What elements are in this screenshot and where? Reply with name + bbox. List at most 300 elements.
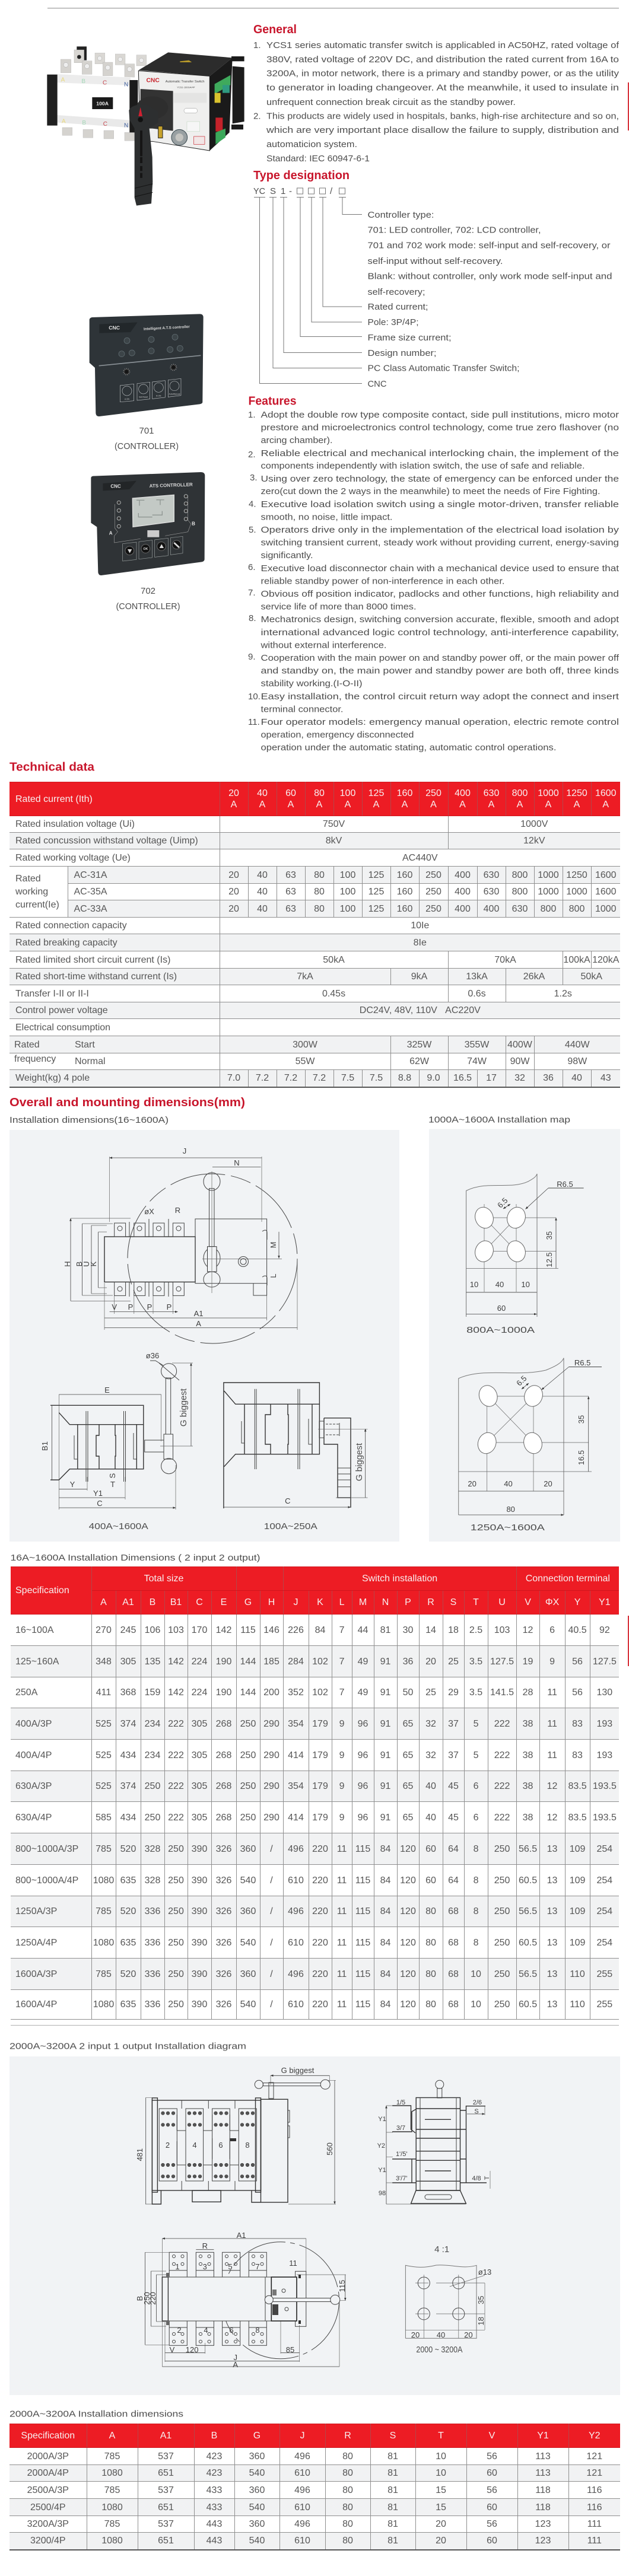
table: 16A-1600A installation dimensions: E	[221, 1597, 227, 1607]
table: 16A-1600A installation dimensions: 179	[312, 1719, 328, 1728]
table: technical data: 160	[397, 904, 412, 913]
table: 2000A-3200A installation dimensions: 785	[104, 2451, 120, 2462]
table: 16A-1600A installation dimensions: 336	[145, 1969, 160, 1979]
table: 16A-1600A installation dimensions: 44	[358, 1625, 368, 1635]
table: technical data: 630	[484, 887, 499, 897]
drawing: 4:1 hole detail: 18	[476, 2317, 485, 2326]
drawing: 800A-1000A hole pattern: 60	[497, 1304, 506, 1313]
table: 16A-1600A installation dimensions: 434	[120, 1750, 136, 1760]
table: 16A-1600A installation dimensions: 38	[523, 1750, 533, 1760]
table: technical data: 7kA	[297, 972, 313, 982]
table: 16A-1600A installation dimensions: 190	[216, 1656, 231, 1667]
table: 16A-1600A installation dimensions: 91	[380, 1750, 390, 1760]
table: 16A-1600A installation dimensions: 8	[474, 1843, 478, 1854]
drawing: 800A-1000A hole pattern: 800A~1000A	[466, 1325, 535, 1335]
table: 16A-1600A installation dimensions: 65	[403, 1750, 413, 1760]
table: 16A-1600A installation dimensions: 1250A/4P	[15, 1937, 57, 1948]
table: 16A-1600A installation dimensions: 222	[494, 1813, 510, 1822]
table: 16A-1600A installation dimensions: /	[270, 1876, 273, 1885]
table: 16A-1600A installation dimensions: H	[268, 1597, 275, 1607]
table: technical data: A	[316, 800, 322, 810]
table: technical data: 60	[285, 788, 296, 798]
photo: controller 701: B ON	[156, 394, 161, 397]
drawing: side view 400A-1600A	[40, 1351, 193, 1510]
drawing: 1250A-1600A hole pattern: 35	[577, 1415, 586, 1424]
table: 16A-1600A installation dimensions: 326	[216, 1906, 231, 1916]
table: technical data: 125	[368, 887, 384, 897]
text block: features list: without external interference.	[260, 641, 387, 650]
table: technical data: Transfer I-II or II-I	[15, 988, 89, 999]
drawing: 1250A-1600A hole pattern: 16.5	[577, 1450, 586, 1465]
drawing: plan view: 7	[255, 2262, 260, 2271]
table: 2000A-3200A installation dimensions: 81	[387, 2519, 398, 2529]
table: technical data: 7.2	[256, 1073, 269, 1083]
table: 16A-1600A installation dimensions: 411	[96, 1687, 111, 1698]
table: 2000A-3200A installation dimensions: 537	[158, 2485, 174, 2495]
table: 16A-1600A installation dimensions: 414	[288, 1813, 304, 1822]
table: 2000A-3200A installation dimensions: 651	[158, 2502, 174, 2513]
diagram: type designation code tree: 701: LED controller, 702: LCD controller,	[368, 225, 541, 235]
table: 16A-1600A installation dimensions: 12	[523, 1625, 533, 1635]
table: 16A-1600A installation dimensions: 11	[337, 1969, 347, 1979]
table: technical data: 1000	[538, 887, 559, 897]
photo: automatic transfer switch: C	[103, 121, 107, 128]
table: 2000A-3200A installation dimensions: 496	[294, 2485, 310, 2495]
text block: features list: Four operator models: emergency manual operation, electric remote control	[261, 717, 619, 727]
table: 16A-1600A installation dimensions: 120	[400, 1937, 416, 1948]
photo: controller 701: A ON	[125, 398, 130, 400]
table: 16A-1600A installation dimensions: 270	[96, 1625, 112, 1635]
table: technical data: Rated connection capacity	[15, 921, 127, 931]
drawing: side elevation with busbars: 3/7	[396, 2125, 405, 2132]
drawing: side view 400A-1600A: Y1	[93, 1489, 103, 1498]
drawing: 800A-1000A hole pattern: 35	[545, 1231, 554, 1240]
table: 16A-1600A installation dimensions: 368	[120, 1687, 136, 1698]
drawing: 4:1 hole detail: 2000 ~ 3200A	[416, 2345, 462, 2355]
table: 16A-1600A installation dimensions: 234	[145, 1750, 160, 1760]
table: technical data: 630	[484, 870, 499, 880]
table: 16A-1600A installation dimensions: 250	[240, 1719, 256, 1728]
table: 2000A-3200A installation dimensions: A1	[160, 2431, 171, 2441]
table: 16A-1600A installation dimensions: 60	[425, 1843, 436, 1854]
heading: Overall and mounting dimensions: Overall and mounting dimensions(mm)	[9, 1096, 245, 1109]
table: 16A-1600A installation dimensions: 6	[474, 1813, 478, 1822]
drawing: plan view: J	[233, 2353, 237, 2362]
table: 16A-1600A installation dimensions: J	[294, 1597, 298, 1607]
table: 16A-1600A installation dimensions: 16~100A	[15, 1625, 54, 1635]
table: 16A-1600A installation dimensions: 37	[448, 1750, 459, 1760]
table: 16A-1600A installation dimensions: 800~1000A/3P	[15, 1843, 78, 1854]
table: technical data: 1600	[595, 788, 617, 798]
drawing: plan view: B	[135, 2296, 144, 2301]
table: 16A-1600A installation dimensions: 3.5	[469, 1656, 482, 1667]
drawing: front elevation with terminals: 4	[192, 2141, 197, 2150]
table: 16A-1600A installation dimensions: 18	[448, 1625, 459, 1635]
photo: automatic transfer switch: N	[124, 123, 128, 129]
table: 2000A-3200A installation dimensions: 2500/4P	[30, 2502, 66, 2513]
table: 2000A-3200A installation dimensions: Y1	[537, 2431, 549, 2441]
table: technical data: 98W	[567, 1056, 587, 1066]
table: technical data: 300W	[293, 1039, 317, 1050]
table: 16A-1600A installation dimensions: 36	[403, 1656, 413, 1667]
table: technical data: 43	[601, 1073, 611, 1083]
table: 2000A-3200A installation dimensions: T	[438, 2431, 444, 2441]
drawing: plan view: 250	[142, 2292, 151, 2305]
photo: automatic transfer switch	[47, 46, 244, 206]
table: 16A-1600A installation dimensions: 81	[380, 1625, 390, 1635]
table: technical data: 800	[512, 788, 528, 798]
diagram: type designation code tree: Pole: 3P/4P;	[368, 317, 419, 327]
table: 16A-1600A installation dimensions: 56	[572, 1687, 583, 1698]
table: 16A-1600A installation dimensions: 336	[145, 1937, 160, 1948]
drawing: plan view: 11	[289, 2259, 297, 2268]
table: 16A-1600A installation dimensions: 115	[355, 1937, 370, 1948]
table: technical data: 1000	[538, 788, 559, 798]
table: 16A-1600A installation dimensions: 7	[339, 1687, 344, 1698]
table: 2000A-3200A installation dimensions: 15	[436, 2502, 446, 2513]
photo: automatic transfer switch: Automatic Transfer Switch	[166, 80, 204, 84]
table: technical data: 100	[340, 788, 355, 798]
photo: automatic transfer switch: YCS1-100GA/4P	[177, 85, 195, 88]
table: 16A-1600A installation dimensions: 5	[474, 1719, 478, 1728]
drawing: side view 400A-1600A: B1	[40, 1441, 49, 1451]
table: technical data: Rated limited short circuit current (Is)	[15, 955, 170, 964]
table: 16A-1600A installation dimensions: 245	[120, 1625, 136, 1635]
table: 16A-1600A installation dimensions: 250	[168, 1969, 184, 1979]
table: technical data: 8kV	[326, 836, 342, 846]
table: 2000A-3200A installation dimensions: R	[344, 2431, 351, 2441]
drawing: side view 400A-1600A: C	[97, 1499, 103, 1508]
table: 16A-1600A installation dimensions: Connection terminal	[526, 1574, 610, 1584]
photo: controller 701: CNC	[109, 325, 120, 331]
table: technical data: 70kA	[494, 955, 516, 964]
photo: controller 702: CNC	[110, 483, 121, 489]
table: 16A-1600A installation dimensions: 6	[474, 1781, 478, 1791]
drawing: side elevation with busbars: Y1	[378, 2116, 386, 2123]
table: 16A-1600A installation dimensions: 630A/4P	[15, 1813, 52, 1822]
table: 16A-1600A installation dimensions: 200	[263, 1687, 279, 1698]
table: 16A-1600A installation dimensions: 250	[494, 1906, 510, 1916]
table: 16A-1600A installation dimensions: 635	[120, 1876, 136, 1885]
text block: general description: 2.	[253, 112, 261, 121]
table: 16A-1600A installation dimensions: 65	[403, 1719, 413, 1728]
drawing: front view: P	[147, 1303, 152, 1311]
table: 16A-1600A installation dimensions: 127.5	[593, 1656, 617, 1667]
drawing: 800A-1000A hole pattern: 10	[521, 1280, 530, 1289]
drawing: front view: V	[112, 1303, 117, 1311]
table: technical data: 7.2	[284, 1073, 297, 1083]
text block: features list: service life of more than 8000 times.	[261, 601, 417, 612]
table: 16A-1600A installation dimensions: 96	[358, 1719, 368, 1728]
table: 16A-1600A installation dimensions: 800~1000A/4P	[15, 1876, 78, 1885]
table: 16A-1600A installation dimensions: 130	[596, 1687, 612, 1698]
table: 16A-1600A installation dimensions: 400A/3P	[15, 1719, 52, 1728]
photo: automatic transfer switch: A	[62, 118, 66, 125]
drawing: plan view: 6	[229, 2326, 234, 2335]
table: technical data: 750V	[323, 819, 345, 829]
table: 16A-1600A installation dimensions: 14	[425, 1625, 436, 1635]
table: 16A-1600A installation dimensions: B	[150, 1597, 155, 1607]
table: technical data: 160	[397, 887, 412, 897]
table: 16A-1600A installation dimensions: 226	[288, 1625, 304, 1635]
table: 16A-1600A installation dimensions: 38	[523, 1781, 533, 1791]
table: 16A-1600A installation dimensions: 102	[312, 1656, 328, 1667]
table: 16A-1600A installation dimensions: 11	[547, 1687, 557, 1698]
table: 16A-1600A installation dimensions: 120	[400, 1999, 416, 2010]
table: technical data: Rated insulation voltage (Ui)	[15, 819, 135, 829]
table: technical data: 63	[285, 887, 296, 897]
table: 16A-1600A installation dimensions: 80	[425, 1969, 436, 1979]
text block: features list: reliable standby power of non-interference in each other.	[261, 577, 504, 586]
table: 16A-1600A installation dimensions: Specification	[15, 1585, 69, 1596]
table: 16A-1600A installation dimensions: 83.5	[568, 1813, 587, 1822]
table: technical data: Start	[75, 1039, 95, 1050]
diagram: type designation code tree: YC	[253, 186, 265, 196]
heading: Type designation: Type designation	[253, 169, 350, 182]
table: 16A-1600A installation dimensions: 250A	[15, 1687, 37, 1698]
table: 16A-1600A installation dimensions: /	[270, 1843, 273, 1854]
table: 2000A-3200A installation dimensions: J	[300, 2431, 305, 2441]
table: 16A-1600A installation dimensions: 45	[448, 1813, 459, 1822]
text block: features list: arcing chamber).	[261, 435, 332, 445]
drawing: side view 100A-250A: C	[285, 1496, 290, 1505]
table: 2000A-3200A installation dimensions: 610	[294, 2468, 310, 2478]
table: 16A-1600A installation dimensions: 115	[355, 1969, 370, 1979]
table: 2000A-3200A installation dimensions: B	[211, 2431, 217, 2441]
table: technical data: Rated current (Ith)	[15, 794, 93, 804]
table: technical data: AC440V	[402, 853, 438, 862]
diagram: type designation code tree: CNC	[368, 379, 387, 389]
table: 16A-1600A installation dimensions: M	[359, 1597, 367, 1607]
caption: Installation dimensions: Installation dimensions(16~1600A)	[9, 1115, 169, 1125]
table: 16A-1600A installation dimensions: 13	[547, 1876, 557, 1885]
table: 16A-1600A installation dimensions: 11	[547, 1750, 557, 1760]
table: 16A-1600A installation dimensions: 60.5	[519, 1876, 537, 1885]
table: 2000A-3200A installation dimensions: 80	[342, 2519, 353, 2529]
drawing: front view: J	[183, 1147, 186, 1155]
table: 16A-1600A installation dimensions: 254	[596, 1843, 612, 1854]
table: technical data: 7.0	[227, 1073, 240, 1083]
table: technical data: 400	[484, 904, 499, 913]
table: 16A-1600A installation dimensions: 390	[192, 1999, 207, 2010]
table: technical data: A	[488, 800, 494, 810]
drawing: side view 400A-1600A: G biggest	[179, 1388, 189, 1426]
text block: general description: 3200A, in motor network, there is a primary and standby power, or as the utility	[266, 69, 620, 78]
table: technical data: 55W	[296, 1056, 314, 1066]
table: 2000A-3200A installation dimensions: 123	[535, 2536, 551, 2546]
table: 16A-1600A installation dimensions: 328	[145, 1876, 160, 1885]
table: technical data: Electrical consumption	[15, 1023, 110, 1032]
table: 16A-1600A installation dimensions: 185	[263, 1656, 279, 1667]
table: 16A-1600A installation dimensions: 390	[192, 1843, 207, 1854]
drawing: front view: P	[167, 1303, 171, 1311]
table: 16A-1600A installation dimensions: B1	[170, 1597, 182, 1607]
table: 2000A-3200A installation dimensions: Specification	[21, 2431, 75, 2441]
table: 16A-1600A installation dimensions: 348	[96, 1656, 112, 1667]
table: 2000A-3200A installation dimensions: 360	[249, 2519, 265, 2529]
table: 16A-1600A installation dimensions: 84	[315, 1625, 325, 1635]
table: 16A-1600A installation dimensions: 141.5	[490, 1687, 514, 1698]
table: 16A-1600A installation dimensions: 352	[288, 1687, 304, 1698]
table: 16A-1600A installation dimensions: G	[244, 1597, 252, 1607]
table: 16A-1600A installation dimensions: 1600A/4P	[15, 1999, 57, 2010]
table: 16A-1600A installation dimensions: 250	[168, 1843, 184, 1854]
table: 2000A-3200A installation dimensions: 610	[294, 2536, 310, 2546]
drawing: 1250A-1600A hole pattern: R6.5	[574, 1358, 590, 1367]
drawing: plan view: 8	[255, 2326, 260, 2335]
table: 16A-1600A installation dimensions: 360	[240, 1906, 256, 1916]
table: technical data: A	[602, 800, 609, 810]
table: 16A-1600A installation dimensions: 268	[216, 1813, 231, 1822]
table: 2000A-3200A installation dimensions: 111	[587, 2536, 602, 2546]
table: technical data: 80	[314, 904, 325, 913]
table: 16A-1600A installation dimensions: 91	[380, 1813, 390, 1822]
table: technical data: 160	[397, 788, 412, 798]
drawing: front view: M	[269, 1242, 278, 1248]
table: 16A-1600A installation dimensions: 1250A/3P	[15, 1906, 57, 1916]
text block: features list: zero(cut down the 2 ways in the meanwhile) to meet the needs of Fire Fighting.	[261, 486, 601, 496]
table: 16A-1600A installation dimensions: /	[270, 1999, 273, 2010]
table: 16A-1600A installation dimensions: 144	[240, 1687, 256, 1698]
table: 16A-1600A installation dimensions: 11	[547, 1719, 557, 1728]
text block: features list: terminal connector.	[261, 705, 343, 714]
table: 16A-1600A installation dimensions: 142	[168, 1656, 184, 1667]
table: 16A-1600A installation dimensions: 520	[120, 1843, 136, 1854]
table: 2000A-3200A installation dimensions: 10	[436, 2468, 446, 2478]
table: technical data: 400	[455, 887, 471, 897]
table: 16A-1600A installation dimensions: S	[450, 1597, 456, 1607]
table: 16A-1600A installation dimensions: 326	[216, 1876, 231, 1885]
text block: features list: Easy installation, the control circuit return way adopt the connect and insert	[261, 692, 620, 702]
table: technical data: 36	[543, 1073, 554, 1083]
table: 16A-1600A installation dimensions: 250	[494, 1843, 510, 1854]
photo: automatic transfer switch: B	[81, 78, 85, 85]
table: 16A-1600A installation dimensions: 115	[355, 1906, 370, 1916]
table: 16A-1600A installation dimensions: 120	[400, 1969, 416, 1979]
table: 16A-1600A installation dimensions: 144	[240, 1656, 256, 1667]
table: 2000A-3200A installation dimensions: 56	[487, 2485, 497, 2495]
table: 16A-1600A installation dimensions: ΦX	[545, 1597, 559, 1607]
text block: general description: YCS1 series automatic transfer switch is applicabled in AC50HZ, rated voltage of	[266, 40, 620, 50]
table: technical data: AC-33A	[74, 904, 107, 913]
table: 16A-1600A installation dimensions: 326	[216, 1999, 231, 2010]
photo: controller 702: A	[109, 530, 113, 536]
table: 16A-1600A installation dimensions: 179	[312, 1750, 328, 1760]
table: 16A-1600A installation dimensions: 49	[358, 1656, 368, 1667]
table: 2000A-3200A installation dimensions: 10	[436, 2451, 446, 2462]
table: 16A-1600A installation dimensions: 83.5	[568, 1781, 587, 1791]
table: 2000A-3200A installation dimensions: 81	[387, 2485, 398, 2495]
table: 16A-1600A installation dimensions: 222	[168, 1781, 184, 1791]
table: 16A-1600A installation dimensions: 254	[596, 1906, 612, 1916]
text block: general description: which are very important place disallow the failure to supply, distribution and	[266, 125, 619, 135]
table: 2000A-3200A installation dimensions: S	[390, 2431, 396, 2441]
text block: general description: This products are widely used in hospitals, banks, high-rise architecture and so on,	[266, 112, 619, 121]
table: 16A-1600A installation dimensions: 525	[96, 1750, 112, 1760]
table: 16A-1600A installation dimensions: 56	[572, 1656, 583, 1667]
drawing: plan view: A	[233, 2360, 238, 2369]
table: 2000A-3200A installation dimensions: 785	[104, 2519, 120, 2529]
drawing: plan view: 1	[175, 2262, 180, 2271]
table: 2000A-3200A installation dimensions: G	[253, 2431, 261, 2441]
table: technical data: 8Ie	[414, 937, 427, 948]
table: 16A-1600A installation dimensions: 220	[312, 1843, 328, 1854]
text block: features list: 8.	[249, 613, 256, 623]
drawing: front elevation with terminals	[135, 2066, 336, 2204]
table: technical data: 63	[285, 870, 296, 880]
table: 16A-1600A installation dimensions: 120	[400, 1843, 416, 1854]
table: 16A-1600A installation dimensions: 30	[403, 1625, 413, 1635]
drawing: front elevation with terminals: 6	[218, 2141, 223, 2150]
table: 16A-1600A installation dimensions: 127.5	[490, 1656, 514, 1667]
table: 16A-1600A installation dimensions: 520	[120, 1906, 136, 1916]
photo: controller 702	[91, 472, 205, 575]
diagram: type designation code tree: Rated current;	[368, 302, 428, 312]
drawing: 1250A-1600A hole pattern	[459, 1358, 602, 1533]
table: 2000A-3200A installation dimensions: 56	[487, 2519, 497, 2529]
table: 16A-1600A installation dimensions: 91	[380, 1687, 390, 1698]
table: 16A-1600A installation dimensions: 92	[599, 1625, 610, 1635]
table: 16A-1600A installation dimensions: 250	[240, 1750, 256, 1760]
table: technical data: A	[459, 800, 466, 810]
table: 16A-1600A installation dimensions: 220	[312, 1969, 328, 1979]
table: technical data: 80	[314, 788, 325, 798]
drawing: 1250A-1600A hole pattern: 40	[504, 1479, 513, 1488]
text block: features list: Using over zero technology, the state of emergency can be enforced under the	[261, 474, 619, 484]
photo: controller 702: OK	[143, 547, 148, 551]
table: 16A-1600A installation dimensions: 84	[380, 1999, 390, 2010]
drawing: front view: K	[89, 1261, 98, 1266]
table: technical data: 20	[228, 887, 239, 897]
table: technical data: 125	[368, 788, 384, 798]
table: 16A-1600A installation dimensions: 19	[523, 1656, 533, 1667]
drawing: plan view: 2	[177, 2326, 182, 2335]
table: 16A-1600A installation dimensions: 305	[192, 1719, 207, 1728]
table: 16A-1600A installation dimensions: 60.5	[519, 1999, 537, 2010]
table: 16A-1600A installation dimensions: 83	[572, 1750, 583, 1760]
diagram: type designation code tree: self-input without self-recovery.	[368, 256, 503, 266]
table: technical data: 800	[569, 904, 584, 913]
drawing: 1250A-1600A hole pattern: 6.5	[514, 1374, 529, 1388]
table: 16A-1600A installation dimensions: 146	[263, 1625, 279, 1635]
drawing: plan view: 4	[204, 2326, 208, 2335]
table: technical data: 800	[541, 904, 556, 913]
table: 16A-1600A installation dimensions: 68	[448, 1937, 459, 1948]
text block: features list: operation under the automatic stating, automatic control operations.	[261, 743, 557, 753]
diagram: type designation code tree: 701 and 702 work mode: self-input and self-recovery, or	[368, 241, 610, 250]
text block: features list: components independently with islation switch, the use of safe and reliable.	[261, 461, 585, 471]
text block: features list: stability working.(I-O-II)	[261, 679, 362, 689]
table: 16A-1600A installation dimensions: 336	[145, 1906, 160, 1916]
text block: features list: Operators drive only in the implementation of the electrical load isolation by	[261, 525, 620, 535]
table: 16A-1600A installation dimensions: 84	[380, 1843, 390, 1854]
table: technical data: 400	[455, 788, 471, 798]
table: 2000A-3200A installation dimensions: 540	[249, 2468, 265, 2478]
table: 16A-1600A installation dimensions: 68	[448, 1906, 459, 1916]
table: 16A-1600A installation dimensions: 40	[425, 1813, 436, 1822]
table: 2000A-3200A installation dimensions: 81	[387, 2502, 398, 2513]
table: 2000A-3200A installation dimensions: 118	[535, 2485, 551, 2495]
table: 16A-1600A installation dimensions: 250	[240, 1813, 256, 1822]
drawing: front view: U	[82, 1261, 91, 1267]
drawing: side elevation with busbars: 98	[379, 2190, 386, 2197]
table: 16A-1600A installation dimensions: 222	[168, 1813, 184, 1822]
table: 16A-1600A installation dimensions: 96	[358, 1750, 368, 1760]
drawing: side view 100A-250A	[224, 1383, 368, 1508]
table: 16A-1600A installation dimensions: 64	[448, 1843, 459, 1854]
table: 16A-1600A installation dimensions: 1600A/3P	[15, 1969, 57, 1979]
table: technical data: A	[545, 800, 551, 810]
